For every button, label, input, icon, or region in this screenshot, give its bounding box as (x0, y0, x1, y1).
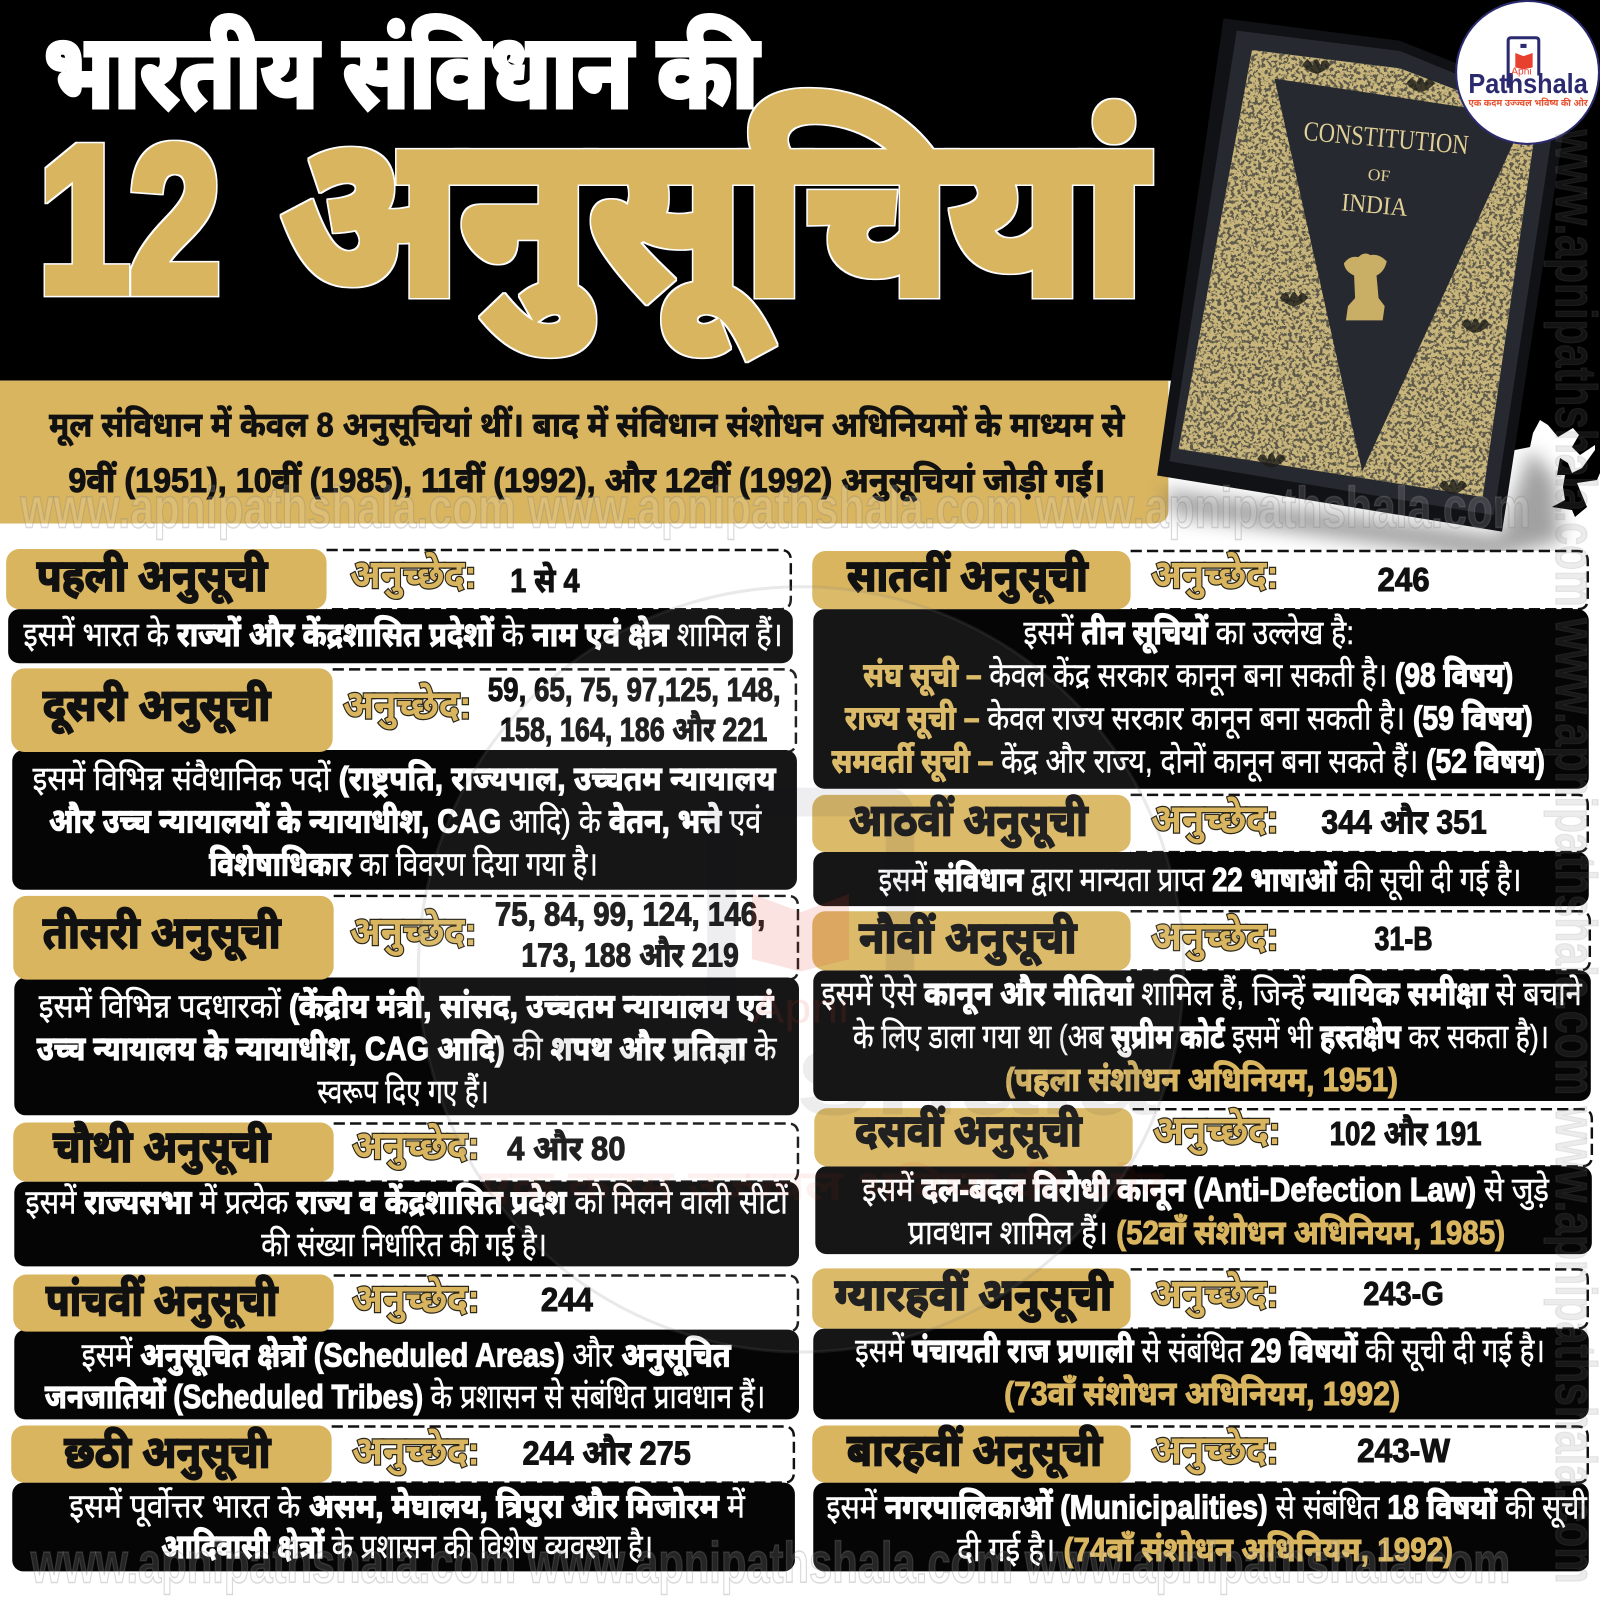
panel: schedule 3: स्वरूप दिए गए हैं। (317, 1072, 489, 1111)
intro band background (0, 381, 1168, 523)
title line 2: अनुसूचियां (282, 93, 1148, 355)
book title: INDIA (1340, 187, 1409, 222)
panel: schedule 1: इसमें भारत के राज्यों और केंद्रशासित प्रदेशों के नाम एवं क्षेत्र शामिल हैं। (23, 615, 783, 654)
panel: schedule 6 (11, 1426, 795, 1571)
book title: OF (1367, 165, 1391, 186)
panel: schedule 4 (13, 1121, 799, 1266)
panel: schedule 12: अनुच्छेद: (1151, 1427, 1279, 1474)
panel: schedule 12: बारहवीं अनुसूची (847, 1424, 1103, 1478)
logo wordmark: Pathshala (1468, 68, 1588, 99)
panel: schedule 9: इसमें ऐसे कानून और नीतियां शामिल हैं, जिन्हें न्यायिक समीक्षा से बचाने (821, 974, 1583, 1015)
panel: schedule 1 (6, 549, 793, 663)
panel: schedule 8: आठवीं अनुसूची (849, 795, 1088, 849)
panel: schedule 7: समवर्ती सूची – केंद्र और राज्य, दोनों कानून बना सकते हैं। (52 विषय) (832, 741, 1545, 782)
panel: schedule 11: ग्यारहवीं अनुसूची (835, 1269, 1113, 1323)
panel: schedule 11: (73वाँ संशोधन अधिनियम, 1992) (1004, 1374, 1400, 1413)
panel: schedule 12 (812, 1424, 1589, 1571)
panel: schedule 6: इसमें पूर्वोत्तर भारत के असम, मेघालय, त्रिपुरा और मिजोरम में (69, 1486, 746, 1527)
icon: national emblem (1344, 253, 1387, 320)
panel: schedule 4: चौथी अनुसूची (53, 1121, 271, 1175)
panel: schedule 3: इसमें विभिन्न पदधारकों (केंद्रीय मंत्री, सांसद, उच्चतम न्यायालय एवं (39, 986, 774, 1025)
panel: schedule 4: अनुच्छेद: (352, 1123, 480, 1170)
panel: schedule 7: 246 (1378, 562, 1430, 599)
watermark: central logo: एक कदम उज्ज्वल भविष्य की ओर (480, 1161, 1165, 1210)
panel: schedule 4: इसमें राज्यसभा में प्रत्येक राज्य व केंद्रशासित प्रदेश को मिलने वाली सीटों (26, 1182, 789, 1221)
panel: schedule 3: 75, 84, 99, 124, 146, (495, 897, 765, 934)
panel: schedule 7: संघ सूची – केवल केंद्र सरकार कानून बना सकती है। (98 विषय) (863, 656, 1513, 697)
panel: schedule 10: अनुच्छेद: (1153, 1108, 1281, 1155)
panel: schedule 7: अनुच्छेद: (1151, 552, 1279, 599)
panel: schedule 11: इसमें पंचायती राज प्रणाली से संबंधित 29 विषयों की सूची दी गई है। (855, 1331, 1545, 1371)
panel: schedule 8: 344 और 351 (1321, 804, 1487, 842)
panel: schedule 8: इसमें संविधान द्वारा मान्यता प्राप्त 22 भाषाओं की सूची दी गई है। (879, 860, 1521, 900)
panel: schedule 11 (812, 1268, 1589, 1419)
panel: schedule 1: अनुच्छेद: (350, 552, 477, 599)
book shadow (1163, 449, 1561, 559)
book title (1303, 115, 1470, 222)
panel: schedule 5: जनजातियों (Scheduled Tribes) के प्रशासन से संबंधित प्रावधान हैं। (45, 1377, 765, 1416)
panel: schedule 1: पहली अनुसूची (37, 550, 268, 604)
panel: schedule 5: पांचवीं अनुसूची (46, 1274, 278, 1328)
panel: schedule 1: 1 से 4 (510, 561, 580, 600)
panel: schedule 10: इसमें दल-बदल विरोधी कानून (Anti-Defection Law) से जुड़े (862, 1170, 1550, 1211)
logo tagline: एक कदम उज्ज्वल भविष्य की ओर (1468, 97, 1589, 108)
title line 1: भारतीय संविधान की (44, 15, 760, 129)
panel: schedule 5 (13, 1274, 799, 1419)
panel: schedule 11: 243-G (1363, 1276, 1444, 1313)
watermark: central logo (418, 587, 1184, 1352)
panel: schedule 3 (13, 896, 799, 1115)
panel: schedule 9: 31-B (1374, 921, 1433, 958)
header background (0, 0, 1600, 381)
panel: schedule 12: इसमें नगरपालिकाओं (Municipalities) से संबंधित 18 विषयों की सूची (827, 1487, 1588, 1527)
panel: schedule 7 (812, 550, 1589, 789)
book triangle (1274, 79, 1520, 471)
panel: schedule 11: अनुच्छेद: (1151, 1271, 1279, 1318)
panel: schedule 5: अनुच्छेद: (352, 1276, 480, 1323)
panel: schedule 4: की संख्या निर्धारित की गई है। (261, 1225, 547, 1264)
logo apni: Apni (1511, 66, 1532, 77)
panel: schedule 8 (812, 795, 1589, 906)
panel: schedule 10: प्रावधान शामिल हैं। (52वाँ संशोधन अधिनियम, 1985) (908, 1213, 1505, 1252)
panel: schedule 6: आदिवासी क्षेत्रों के प्रशासन की विशेष व्यवस्था है। (161, 1527, 653, 1566)
intro text: 9वीं (1951), 10वीं (1985), 11वीं (1992), और 12वीं (1992) अनुसूचियां जोड़ी गईं। (68, 460, 1105, 502)
panel: schedule 8: अनुच्छेद: (1151, 797, 1279, 844)
icon: map fragment (1480, 360, 1600, 517)
panel: schedule 3: 173, 188 और 219 (521, 936, 739, 974)
panel: schedule 2: 59, 65, 75, 97,125, 148, (488, 672, 781, 709)
panel: schedule 10 (814, 1105, 1592, 1254)
panel: schedule 5: 244 (541, 1282, 593, 1319)
panel: schedule 6: छठी अनुसूची (64, 1426, 271, 1480)
panel: schedule 10: 102 और 191 (1330, 1115, 1482, 1153)
book ornament (1179, 50, 1537, 497)
panel: schedule 5: इसमें अनुसूचित क्षेत्रों (Scheduled Areas) और अनुसूचित (82, 1335, 732, 1376)
panel: schedule 9: के लिए डाला गया था (अब सुप्रीम कोर्ट इसमें भी हस्तक्षेप कर सकता है)। (853, 1017, 1549, 1058)
panel: schedule 3: तीसरी अनुसूची (43, 907, 281, 961)
panel: schedule 2: 158, 164, 186 और 221 (500, 711, 767, 749)
panel: schedule 12: 243-W (1357, 1433, 1450, 1470)
panel: schedule 7: राज्य सूची – केवल राज्य सरकार कानून बना सकती है। (59 विषय) (845, 699, 1533, 740)
panel: schedule 2: दूसरी अनुसूची (43, 679, 271, 734)
panel: schedule 7: सातवीं अनुसूची (847, 550, 1088, 604)
panel: schedule 7: इसमें तीन सूचियों का उल्लेख है: (1023, 613, 1354, 654)
icon: phone book (1508, 38, 1539, 88)
panel: schedule 9: अनुच्छेद: (1151, 914, 1279, 961)
panel: schedule 3: उच्च न्यायालय के न्यायाधीश, CAG आदि) की शपथ और प्रतिज्ञा के (37, 1029, 778, 1068)
book lotus marks (1257, 59, 1490, 494)
title line 2: 12 (39, 103, 220, 335)
panel: schedule 2: इसमें विभिन्न संवैधानिक पदों (राष्ट्रपति, राज्यपाल, उच्चतम न्यायालय (33, 759, 776, 798)
panel: schedule 2 (11, 668, 797, 890)
panel: schedule 4: 4 और 80 (507, 1130, 626, 1168)
logo (1456, 1, 1599, 144)
panel: schedule 9: (पहला संशोधन अधिनियम, 1951) (1005, 1061, 1398, 1099)
book: Constitution of India (1157, 18, 1567, 532)
watermark: central logo: Pathshala (490, 1005, 1156, 1140)
panel: schedule 6: अनुच्छेद: (352, 1428, 480, 1475)
panel: schedule 2: विशेषाधिकार का विवरण दिया गया है। (209, 845, 598, 884)
panel: schedule 2: और उच्च न्यायालयों के न्यायाधीश, CAG आदि) के वेतन, भत्ते एवं (49, 802, 762, 841)
panel: schedule 6: 244 और 275 (522, 1434, 691, 1472)
intro text: मूल संविधान में केवल 8 अनुसूचियां थीं। बाद में संविधान संशोधन अधिनियमों के माध्यम से (49, 405, 1126, 447)
panel: schedule 9 (812, 911, 1591, 1101)
watermark: central logo: Apni (752, 984, 849, 1032)
panel: schedule 3: अनुच्छेद: (350, 909, 477, 956)
panel: schedule 9: नौवीं अनुसूची (859, 912, 1077, 966)
panel: schedule 10: दसवीं अनुसूची (855, 1105, 1082, 1159)
panel: schedule 12: दी गई है। (74वाँ संशोधन अधिनियम, 1992) (957, 1530, 1453, 1569)
panel: schedule 2: अनुच्छेद: (343, 682, 471, 729)
book title: CONSTITUTION (1303, 115, 1470, 160)
intro text (49, 405, 1126, 502)
